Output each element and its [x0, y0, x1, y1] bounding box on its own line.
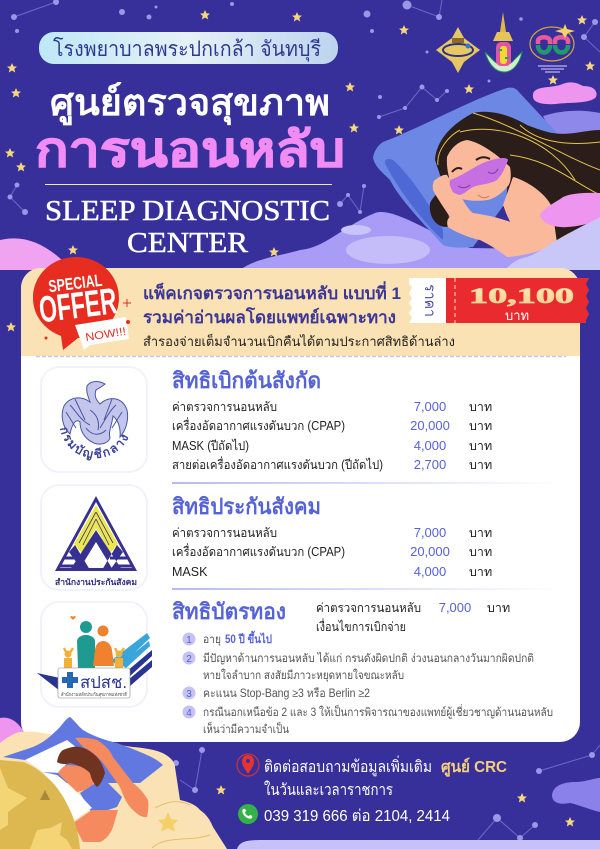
conditions: 1: [186, 635, 192, 646]
garuda emblem: [62, 382, 128, 444]
illustration: sleeping man: [0, 717, 227, 849]
fee: [316, 600, 510, 634]
star blanket: [0, 760, 80, 849]
rows: 20,000: [410, 418, 450, 433]
hospital name pill: [39, 32, 338, 64]
hospital logos: [436, 12, 575, 73]
section: civil servant: [172, 368, 560, 484]
rows: ค่าตรวจการนอนหลับ: [172, 526, 277, 540]
hospital name pill: โรงพยาบาลพระปกเกล้า จันทบุรี: [53, 37, 321, 62]
eye mask: [450, 158, 508, 195]
conditions: 3: [186, 689, 192, 700]
rows: [172, 399, 492, 472]
shirt: [43, 772, 92, 822]
white sheet: [25, 740, 77, 773]
heading: การนอนหลับ: การนอนหลับ: [35, 124, 345, 177]
logo card: NHSO: สปสช.: [80, 673, 127, 692]
heading: สิทธิเบิกต้นสังกัด: [172, 368, 321, 393]
cloud: bottom right purple: [552, 778, 600, 812]
rows: บาท: [469, 545, 492, 559]
contact: address: [237, 754, 507, 799]
logo: gold emblem: [436, 27, 480, 73]
hair: [435, 112, 600, 243]
rows: 7,000: [414, 399, 446, 414]
price ticket: ราคา: [421, 284, 438, 317]
cream blanket: [0, 732, 227, 849]
english title: [45, 195, 330, 259]
conditions: กรณีนอกเหนือข้อ 2 และ 3 ให้เป็นการพิจารณาของแพทย์ผู้เชี่ยวชาญด้านนอนหลับ: [203, 704, 553, 719]
price ticket: [409, 278, 589, 323]
eyebrow marks: [452, 157, 490, 172]
blanket stars: [0, 768, 72, 849]
cloud: bottom lavender: [237, 840, 600, 849]
small pillow: [80, 778, 122, 815]
illustration: sleeping woman: [373, 88, 600, 257]
white card: [21, 268, 580, 742]
heading: ศูนย์ตรวจสุขภาพ: ศูนย์ตรวจสุขภาพ: [50, 82, 330, 126]
heading: สิทธิประกันสังคม: [172, 494, 321, 519]
price ticket: 10,100: [469, 283, 574, 308]
cloud: lavender behind the pillow: [543, 111, 600, 150]
package heading: รวมค่าอ่านผลโดยแพทย์เฉพาะทาง: [143, 307, 396, 327]
price ticket: บาท: [505, 308, 529, 323]
rows: [172, 525, 492, 579]
rows: เครื่องอัดอากาศแรงดันบวก (CPAP): [172, 543, 345, 559]
logo card: NHSO: สำนักงานหลักประกันสุขภาพแห่งชาติ: [61, 691, 127, 698]
rows: MASK: [172, 565, 208, 579]
rows: เครื่องอัดอากาศแรงดันบวก (CPAP): [172, 417, 345, 433]
special offer badge: NOW!!!: [85, 326, 127, 344]
star on cream blanket: [158, 812, 178, 832]
logo card: comptroller general: กรมบัญชีกลาง: [60, 427, 128, 460]
rows: 7,000: [414, 525, 446, 540]
conditions: [182, 630, 553, 736]
english title: SLEEP DIAGNOSTIC: [45, 195, 330, 227]
contact: address: ติดต่อสอบถามข้อมูลเพิ่มเติม: [264, 755, 432, 777]
rows: บาท: [469, 419, 492, 433]
logo: PKH: [530, 24, 575, 73]
fee: ค่าตรวจการนอนหลับ: [316, 601, 421, 615]
rows: บาท: [469, 400, 492, 414]
title divider: [45, 184, 332, 185]
package heading: แพ็คเกจตรวจการนอนหลับ แบบที่ 1: [143, 281, 401, 303]
section: gold card: [172, 599, 553, 736]
conditions: คะแนน Stop-Bang ≥3 หรือ Berlin ≥2: [203, 687, 370, 700]
logo card: social security: สำนักงานประกันสังคม: [55, 577, 137, 587]
contact: phone: 039 319 666 ต่อ 2104, 2414: [264, 808, 450, 825]
fee: 7,000: [439, 600, 471, 615]
shoulder: [503, 177, 557, 243]
conditions: มีปัญหาด้านการนอนหลับ ได้แก่ กรนดังผิดปกติ ง่วงนอนกลางวันมากผิดปกติ: [203, 652, 534, 665]
pillow: [373, 88, 557, 248]
face: [58, 765, 95, 792]
blue pillow: [3, 717, 163, 783]
pink cloud: [0, 718, 24, 745]
fee: บาท: [487, 601, 510, 615]
conditions: อายุ: [203, 634, 221, 646]
icon: map pin: [237, 754, 259, 776]
reimbursement note: สำรองจ่ายเต็มจำนวนเบิกคืนได้ตามประกาศสิทธิด้านล่าง: [143, 332, 455, 349]
icon: phone: [238, 804, 258, 824]
special offer badge: [33, 257, 131, 350]
package heading: [143, 281, 401, 327]
rows: 2,700: [414, 457, 446, 472]
hair highlights: [438, 113, 600, 195]
contact: phone: [238, 804, 450, 825]
rows: 4,000: [414, 438, 446, 453]
cloud: right pink over hair: [540, 193, 600, 227]
conditions: เห็นว่ามีความจำเป็น: [203, 721, 289, 736]
offer panel: [21, 268, 580, 356]
logo card: NHSO: [37, 602, 152, 707]
rows: 20,000: [410, 544, 450, 559]
conditions: 4: [186, 708, 192, 719]
cloud: top right pink: [533, 82, 597, 104]
conditions: 50 ปี ขึ้นไป: [225, 630, 272, 646]
rows: MASK (ปีถัดไป): [172, 439, 249, 453]
section: social security: [172, 494, 560, 590]
contact: address: ในวันและเวลาราชการ: [264, 780, 393, 799]
english title: CENTER: [127, 227, 249, 259]
contact: address: ศูนย์ CRC: [441, 757, 507, 778]
logo card: social security: [41, 485, 147, 590]
clouds: lower bedding: [0, 212, 600, 270]
rows: ค่าตรวจการนอนหลับ: [172, 400, 277, 414]
special offer badge: SPECIAL: [47, 271, 103, 296]
special offer badge: OFFER: [37, 280, 119, 330]
arm over head: [75, 738, 148, 817]
fee: เงื่อนไขการเบิกจ่าย: [316, 618, 406, 634]
conditions: หายใจลำบาก สงสัยมีภาวะหยุดหายใจขณะหลับ: [203, 669, 404, 682]
body: [73, 810, 118, 842]
rows: สายต่อเครื่องอัดอากาศแรงดันบวก (ปีถัดไป): [172, 456, 383, 472]
rows: บาท: [469, 439, 492, 453]
cloud: bedding foreground: [505, 217, 600, 270]
heading: สิทธิบัตรทอง: [172, 599, 286, 624]
face: [447, 140, 511, 201]
logo: faculty crest: [485, 12, 522, 72]
rows: 4,000: [414, 564, 446, 579]
rows: บาท: [469, 565, 492, 579]
conditions: 2: [186, 654, 192, 665]
rows: บาท: [469, 458, 492, 472]
logo card: comptroller general: [40, 366, 148, 473]
rows: บาท: [469, 526, 492, 540]
mouth: [478, 195, 489, 198]
hair: [57, 747, 105, 787]
hand and arm: [433, 175, 557, 257]
